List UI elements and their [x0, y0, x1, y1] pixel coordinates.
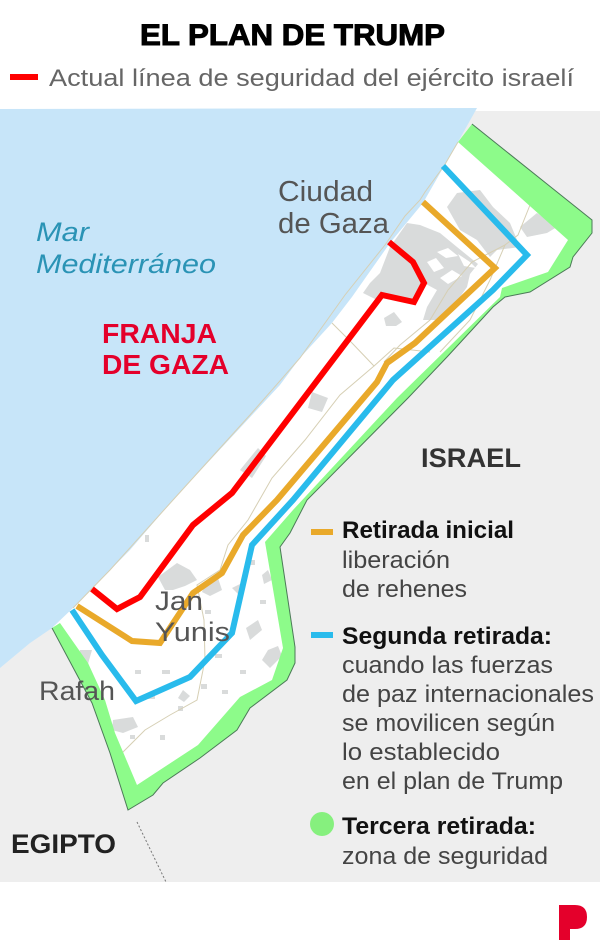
label: Franja de Gaza: DE GAZA [102, 349, 229, 380]
label: Egipto: EGIPTO [11, 829, 116, 859]
label: Franja de Gaza [102, 318, 229, 380]
legend description: de paz internacionales [342, 681, 594, 708]
label: Ciudad de Gaza: Ciudad [278, 176, 373, 208]
roads [73, 142, 530, 760]
Egypt border dotted line [137, 822, 166, 882]
icon: orange dash [311, 529, 333, 535]
sea: Mediterranean [0, 108, 477, 668]
legend description: se movilicen según [342, 710, 555, 737]
icon: blue dash [311, 632, 333, 638]
legend heading: Segunda retirada: [342, 623, 552, 650]
first withdrawal line: orange [77, 202, 495, 643]
legend description: zona de seguridad [342, 843, 548, 870]
label: Jan Yunis: Yunis [155, 617, 230, 647]
urban areas [78, 190, 557, 740]
legend description: de rehenes [342, 576, 467, 603]
legend: second withdrawal [311, 623, 594, 795]
legend description [342, 547, 467, 603]
label: Jan Yunis: Jan [155, 586, 203, 616]
label: Rafah: Rafah [39, 676, 115, 706]
subtitle legend: red line [10, 65, 574, 92]
label: Mar Mediterráneo: Mar [36, 217, 90, 247]
legend description: lo establecido [342, 739, 500, 766]
label: Ciudad de Gaza [278, 176, 390, 240]
legend description: en el plan de Trump [342, 768, 563, 795]
legend: third withdrawal [310, 812, 548, 870]
legend description: cuando las fuerzas [342, 652, 553, 679]
icon: publisher logo P [559, 905, 587, 940]
legend heading: Tercera retirada: [342, 813, 536, 840]
subtitle text: Actual línea de seguridad del ejército israelí [49, 65, 574, 92]
legend description: liberación [342, 547, 450, 574]
label: Mar Mediterráneo: Mediterráneo [36, 249, 216, 279]
legend heading: Retirada inicial [342, 517, 514, 544]
strip border [52, 124, 592, 810]
title: EL PLAN DE TRUMP [140, 19, 445, 52]
label: Jan Yunis [155, 586, 230, 647]
label: Ciudad de Gaza: de Gaza [278, 208, 390, 240]
Gaza strip territory [52, 124, 592, 810]
label: Mar Mediterráneo [36, 217, 216, 279]
icon: green circle [310, 812, 334, 836]
icon: red dash [10, 74, 38, 80]
current security line: red [92, 242, 424, 609]
second withdrawal line: blue [72, 166, 527, 701]
legend description [342, 652, 594, 795]
open gaps in the built-up area [427, 248, 476, 284]
legend: initial withdrawal [311, 517, 514, 603]
label: Franja de Gaza: FRANJA [102, 318, 217, 349]
label: Israel: ISRAEL [421, 443, 521, 473]
third withdrawal zone: green security band [52, 124, 592, 810]
